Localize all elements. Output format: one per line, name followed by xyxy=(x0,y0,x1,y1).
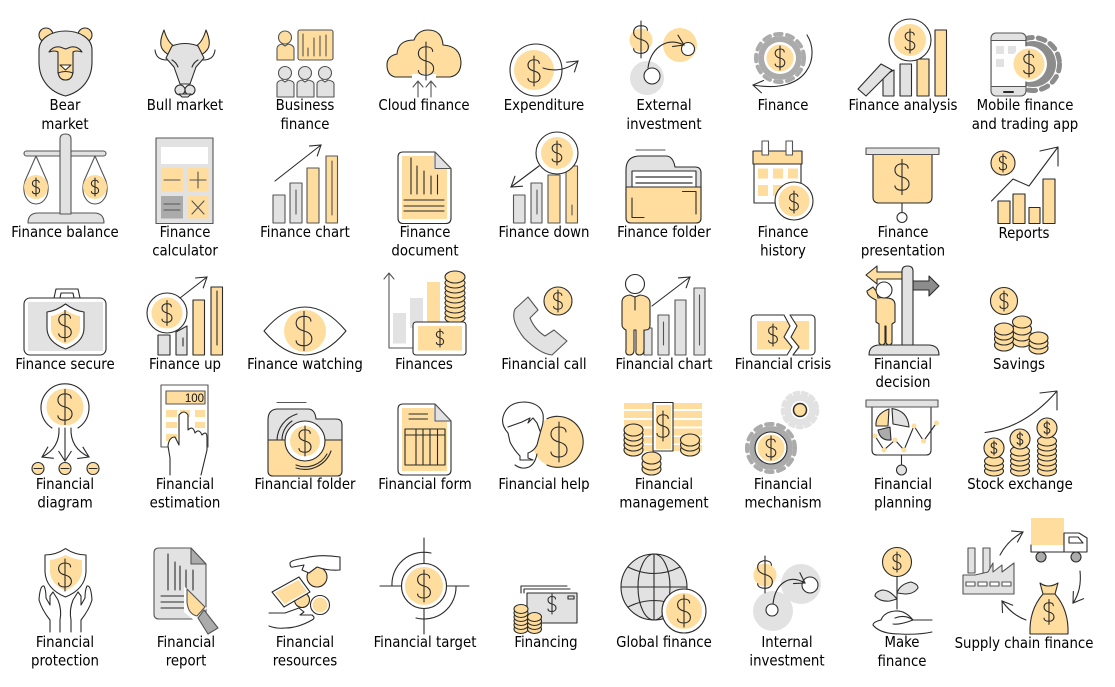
icon: banknote and coin stacks xyxy=(624,402,702,475)
icon: torn banknote xyxy=(751,314,815,356)
label: Financial folder xyxy=(254,476,356,493)
icon: hands with money xyxy=(269,556,340,628)
icon: presentation board with charts xyxy=(866,400,939,475)
panel: Financial target xyxy=(374,538,476,651)
label: mechanism xyxy=(744,494,822,512)
panel: Financial call xyxy=(501,287,587,373)
label: Supply chain finance xyxy=(955,635,1093,652)
panel: Financing xyxy=(514,586,578,651)
panel: Financial resources xyxy=(269,556,340,670)
label: planning xyxy=(874,494,932,512)
label: Reports xyxy=(998,225,1050,242)
label: Financial target xyxy=(374,634,476,651)
icon: person with bars xyxy=(622,274,705,355)
panel: Business finance xyxy=(276,30,334,133)
icon: magnifier over bars xyxy=(858,19,946,96)
icon: growth chart xyxy=(991,147,1058,224)
icon: coin with arrow xyxy=(510,44,578,96)
panel: Finance document xyxy=(391,152,459,260)
panel: Finance secure xyxy=(15,289,115,373)
icon: document with chart xyxy=(398,152,451,224)
panel: Financial estimation xyxy=(150,385,220,512)
panel: Finance folder xyxy=(617,150,711,241)
icon: scales xyxy=(24,134,107,223)
label: market xyxy=(41,116,89,133)
panel: Finance calculator xyxy=(152,138,218,260)
label: Finance analysis xyxy=(849,97,958,114)
icon: calendar with coin xyxy=(753,141,813,220)
label: investment xyxy=(749,652,825,670)
panel: Financial folder xyxy=(254,402,356,493)
icon: phone handset and coin xyxy=(514,287,572,355)
display value: 100 xyxy=(185,393,204,405)
panel: Financial report xyxy=(154,548,218,670)
panel: Financial help xyxy=(498,402,590,493)
panel: Finance history xyxy=(753,141,813,260)
icon: eye with dollar xyxy=(264,307,346,355)
icon: cloud with dollar xyxy=(387,30,461,97)
label: Financial xyxy=(874,476,932,493)
label: Finance xyxy=(758,97,808,114)
icon: magnifier and falling arrow xyxy=(511,132,578,223)
icon: folder with sheet xyxy=(626,150,701,223)
icon: factory, truck, money bag xyxy=(963,518,1087,634)
panel: Bull market xyxy=(147,30,223,114)
icon: coin with three arrows xyxy=(32,384,99,474)
icon: projection screen xyxy=(866,148,939,222)
panel: Expenditure xyxy=(504,44,584,114)
icon: magnifier and rising bars xyxy=(147,277,222,355)
label: Finance folder xyxy=(617,224,711,241)
label: Financial xyxy=(36,634,94,651)
label: decision xyxy=(876,374,930,391)
label: Finance chart xyxy=(260,224,350,241)
label: Financial xyxy=(874,356,932,373)
label: Finance xyxy=(160,224,210,241)
label: Finance up xyxy=(149,356,221,373)
icon: globe with coin xyxy=(621,554,706,633)
icon: banknotes and coins xyxy=(514,586,577,634)
icon: signpost and person xyxy=(866,266,939,355)
panel: Make finance xyxy=(873,548,932,670)
label: Financial crisis xyxy=(735,356,831,373)
label: Bull market xyxy=(147,97,223,114)
label: Internal xyxy=(761,634,813,651)
label: history xyxy=(760,242,806,260)
label: investment xyxy=(626,116,702,133)
panel: Finance down xyxy=(499,132,589,241)
label: document xyxy=(391,242,459,260)
panel: Mobile finance and trading app xyxy=(972,33,1078,133)
icon: report and pen xyxy=(154,548,218,634)
label: Finance down xyxy=(499,224,589,241)
icon: briefcase with shield xyxy=(24,289,106,355)
panel: Cloud finance xyxy=(378,30,470,114)
label: Financial xyxy=(635,476,693,493)
icon: bars with arrow xyxy=(273,145,338,223)
label: Financial xyxy=(157,634,215,651)
icon: person with coin xyxy=(503,402,584,468)
icon: investment path xyxy=(630,21,697,95)
label: Financial chart xyxy=(615,356,713,373)
label: Finance balance xyxy=(11,224,119,241)
panel: Finance xyxy=(753,34,812,114)
panel: Bear market xyxy=(39,28,92,133)
icon: gear with coin xyxy=(753,34,812,87)
panel: Finance watching xyxy=(247,307,363,373)
icon: folder with coin xyxy=(268,402,342,476)
label: Cloud finance xyxy=(378,97,470,114)
icon: target with dollar xyxy=(380,538,469,634)
icon: bull xyxy=(155,30,215,97)
icon: hand growing coin plant xyxy=(873,548,932,634)
label: Make xyxy=(884,634,920,651)
label: Financing xyxy=(514,634,578,651)
label: Finance xyxy=(878,224,928,241)
icon: shield held by hands xyxy=(39,549,92,632)
label: Financial xyxy=(156,476,214,493)
panel: Internal investment xyxy=(749,556,825,670)
panel: Financial mechanism xyxy=(744,392,822,512)
panel: Financial protection xyxy=(31,549,99,670)
icon: coin and stacks xyxy=(990,288,1048,354)
label: protection xyxy=(31,652,99,670)
label: Mobile finance xyxy=(977,97,1073,114)
panel: Savings xyxy=(990,288,1048,373)
label: Business xyxy=(276,97,334,114)
label: calculator xyxy=(152,242,218,260)
label: Financial form xyxy=(378,476,472,493)
panel: External investment xyxy=(626,21,702,133)
panel: Finance balance xyxy=(11,134,119,241)
panel: Global finance xyxy=(616,554,712,651)
label: Financial help xyxy=(498,476,590,493)
label: Finance xyxy=(400,224,450,241)
label: Finance xyxy=(758,224,808,241)
label: External xyxy=(636,97,692,114)
label: and trading app xyxy=(972,116,1078,133)
panel: Finance presentation xyxy=(861,148,945,260)
panel: Finances xyxy=(384,271,466,373)
label: report xyxy=(166,652,206,670)
panel: Reports xyxy=(991,147,1058,242)
label: Expenditure xyxy=(504,97,584,114)
label: Savings xyxy=(993,356,1045,373)
label: finance xyxy=(281,116,329,133)
label: Bear xyxy=(50,97,81,114)
label: Global finance xyxy=(616,634,712,651)
icon: business people and board xyxy=(277,30,334,97)
icon: chart, coins and banknote xyxy=(384,271,466,355)
icon: phone with gear and coin xyxy=(991,33,1060,96)
label: Financial xyxy=(276,634,334,651)
panel: Financial form xyxy=(378,404,472,493)
panel: Financial planning xyxy=(866,400,939,512)
label: Stock exchange xyxy=(967,476,1073,493)
label: Financial xyxy=(36,476,94,493)
panel: Financial chart xyxy=(615,274,713,373)
label: management xyxy=(619,494,709,512)
icon: investment path xyxy=(753,556,821,631)
label: resources xyxy=(273,652,337,670)
label: Finance watching xyxy=(247,356,363,373)
icon: form with table xyxy=(398,404,451,475)
icon: three coin stacks and rising arrow xyxy=(984,391,1057,476)
label: Finance secure xyxy=(15,356,115,373)
panel: Finance up xyxy=(147,277,222,373)
label: estimation xyxy=(150,494,220,512)
panel: Financial decision xyxy=(866,266,939,391)
label: presentation xyxy=(861,242,945,260)
icon: two gears xyxy=(747,392,818,472)
panel: Stock exchange xyxy=(967,391,1073,493)
panel: Financial crisis xyxy=(735,314,831,373)
panel: Finance chart xyxy=(260,145,350,241)
panel: Financial management xyxy=(619,402,709,512)
icon: calculator xyxy=(156,138,213,224)
panel: Financial diagram xyxy=(32,384,99,512)
label: Financial call xyxy=(501,356,587,373)
label: Financial xyxy=(754,476,812,493)
panel: Supply chain finance xyxy=(955,518,1093,652)
label: Finances xyxy=(395,356,453,373)
panel: Finance analysis xyxy=(849,19,958,114)
icon: bear xyxy=(39,28,92,96)
label: finance xyxy=(878,653,926,670)
label: diagram xyxy=(37,494,93,512)
